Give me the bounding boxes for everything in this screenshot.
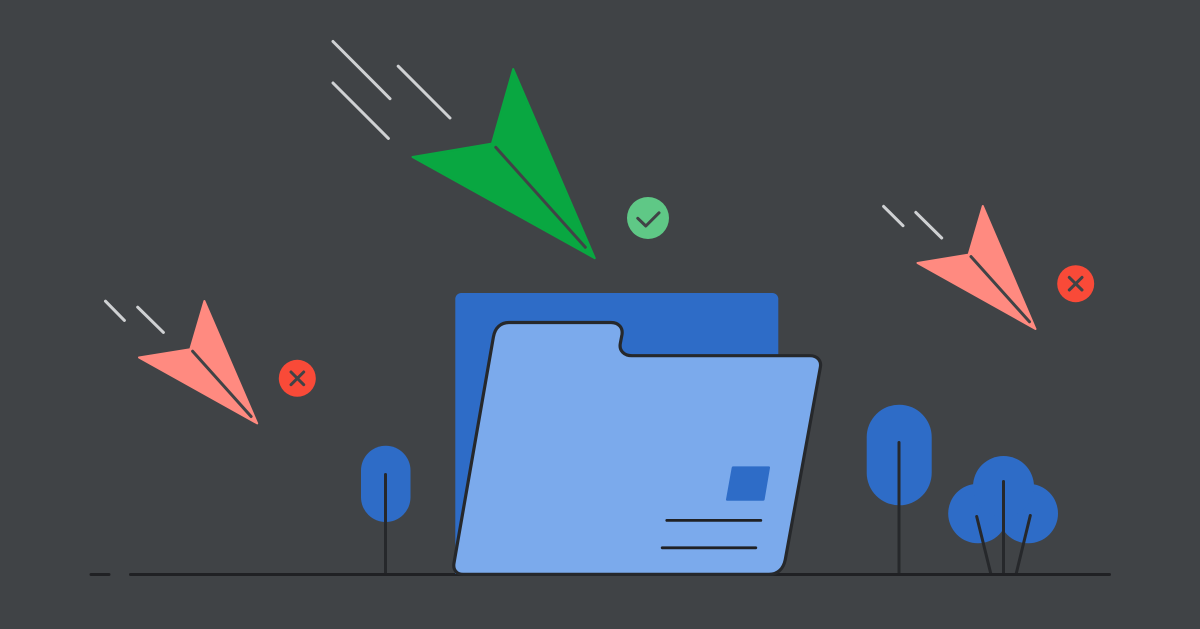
status icon: check (627, 197, 669, 239)
folder back panel (455, 293, 778, 574)
paper plane: left salmon (139, 301, 257, 423)
status icon: right cross (1057, 265, 1094, 302)
motion streaks: green plane (333, 42, 450, 138)
folder text lines (662, 520, 761, 548)
folder label square (726, 466, 770, 501)
paper plane: green (412, 69, 595, 258)
tree: tall right (867, 405, 932, 574)
tree: cluster (948, 456, 1058, 574)
ground line (91, 573, 1110, 576)
motion streaks: right plane (884, 206, 942, 238)
motion streaks: left plane (106, 301, 163, 332)
status icon: left cross (279, 360, 316, 397)
folder (454, 293, 821, 574)
folder front panel (454, 322, 821, 574)
paper plane: right salmon (918, 206, 1036, 329)
tree: left (361, 446, 410, 574)
